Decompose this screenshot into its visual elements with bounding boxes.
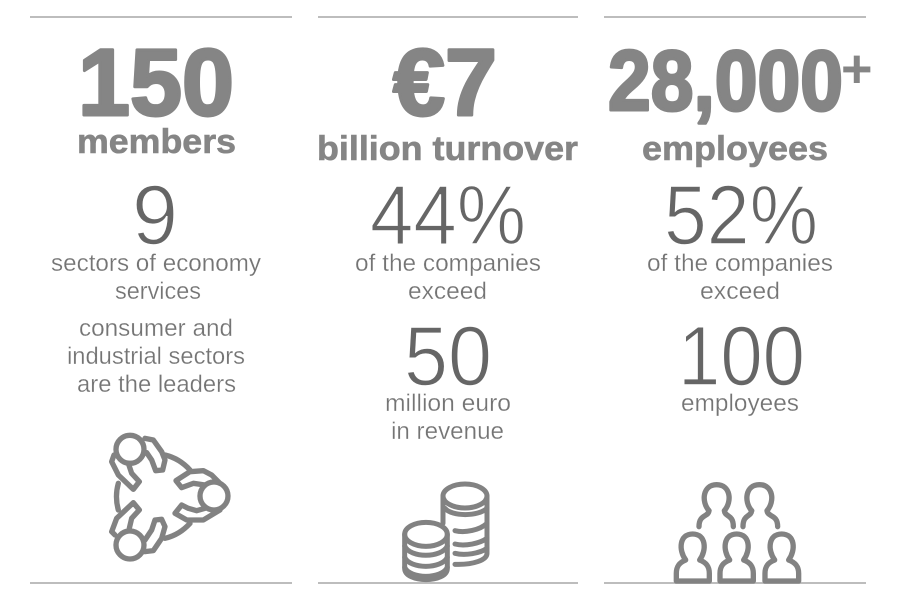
- text: sectors of economy services: sectors of economy: [51, 250, 261, 277]
- icon: stacks of coins: [405, 484, 487, 580]
- text: of the companies exceed: of the companies: [647, 250, 833, 277]
- statistic: 44%: 44%: [370, 168, 526, 262]
- text: of the companies exceed: [647, 250, 833, 305]
- statistic: 100: 100: [678, 309, 805, 403]
- icon: three people around a table: [112, 435, 228, 559]
- headline: €7 billion: €7: [393, 30, 497, 136]
- subheading: billion turnover: billion turnover: [317, 130, 578, 168]
- panel: members column: [51, 30, 261, 559]
- text: of the companies exceed: of the companies: [355, 250, 541, 277]
- panel: turnover column: [317, 30, 578, 580]
- subheading: employees: employees: [642, 130, 828, 168]
- panel: employees column: [608, 34, 873, 581]
- text: million euro in revenue: in revenue: [391, 418, 504, 445]
- text: sectors of economy services: services: [115, 278, 201, 305]
- text: million euro in revenue: million euro: [385, 390, 511, 417]
- text: of the companies exceed: exceed: [700, 278, 780, 305]
- text: employees: employees: [681, 390, 799, 417]
- icon: group of people: [676, 485, 799, 581]
- statistic: 50: 50: [404, 309, 492, 403]
- text: consumer and industrial sectors are the leaders: consumer and: [79, 315, 233, 342]
- text: million euro in revenue: [385, 390, 511, 445]
- statistic: 9: 9: [132, 168, 178, 262]
- text: sectors of economy services: [51, 250, 261, 305]
- text: consumer and industrial sectors are the leaders: are the leaders: [77, 371, 236, 398]
- headline: 28,000+: +: [841, 39, 873, 99]
- statistic: 52%: 52%: [664, 168, 818, 262]
- headline: 150: 150: [78, 30, 234, 136]
- text: consumer and industrial sectors are the leaders: industrial sectors: [67, 343, 245, 370]
- text: of the companies exceed: [355, 250, 541, 305]
- text: consumer and industrial sectors are the leaders: [67, 315, 245, 398]
- subheading: members: members: [77, 123, 236, 161]
- headline: 28,000+: 28,000: [608, 34, 843, 129]
- text: of the companies exceed: exceed: [408, 278, 487, 305]
